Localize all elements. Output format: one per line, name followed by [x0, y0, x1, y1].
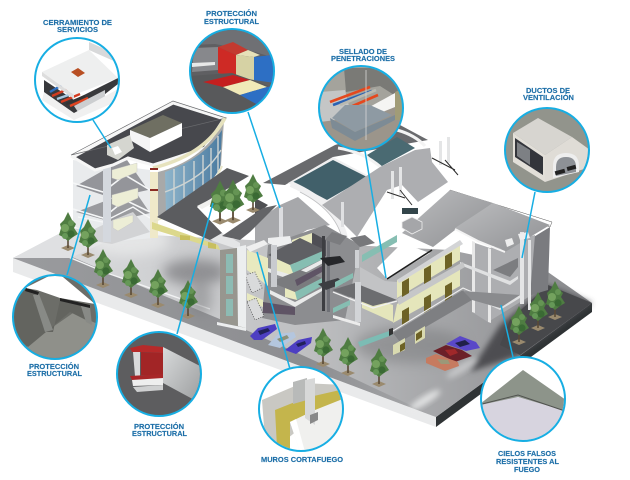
- curved glass facade: [150, 118, 225, 238]
- roof: [73, 103, 224, 170]
- callout: protección estructural left: [10, 272, 100, 378]
- callout: ductos de ventilación: [505, 86, 590, 192]
- label: [132, 422, 187, 438]
- label: [43, 18, 112, 34]
- label: MUROS CORTAFUEGO: [261, 455, 343, 464]
- stair tower: [217, 245, 246, 331]
- label: RESISTENTES AL: [496, 457, 559, 466]
- label: [331, 47, 395, 63]
- callout: cerramiento de servicios: [35, 18, 125, 122]
- label: [523, 86, 574, 102]
- label: FUEGO: [514, 465, 540, 474]
- arched central roof: [255, 125, 458, 245]
- ground shadows: [90, 224, 479, 413]
- label: DUCTOS DE: [526, 86, 570, 95]
- left building with curved facade: [71, 101, 277, 250]
- label: ESTRUCTURAL: [132, 429, 187, 438]
- label: PENETRACIONES: [331, 54, 395, 63]
- label: CERRAMIENTO DE: [43, 18, 112, 27]
- trees: [59, 174, 565, 387]
- label: CIELOS FALSOS: [498, 449, 556, 458]
- leader lines: [67, 112, 535, 369]
- callout: cielos falsos: [480, 357, 566, 474]
- label: PROTECCIÓN: [206, 9, 257, 18]
- service boxes: [112, 163, 138, 231]
- callout: protección estructural top: [190, 9, 280, 115]
- stairs: [245, 272, 264, 320]
- cream facade with doors: [393, 240, 520, 355]
- label: SERVICIOS: [57, 25, 98, 34]
- label: ESTRUCTURAL: [27, 369, 82, 378]
- central tiered block: [245, 225, 432, 347]
- label: [204, 9, 259, 26]
- callout: sellado de penetraciones: [318, 47, 404, 150]
- label: [496, 449, 559, 474]
- doors: [402, 252, 452, 326]
- label: PROTECCIÓN: [134, 422, 184, 431]
- walkway: [393, 288, 520, 342]
- penthouse box: [107, 115, 182, 160]
- label: PROTECCIÓN: [29, 362, 79, 371]
- canopy: [152, 168, 277, 250]
- label: ESTRUCTURAL: [204, 17, 259, 26]
- callout: protección estructural center: [117, 332, 202, 438]
- label: SELLADO DE: [339, 47, 387, 56]
- ground platform: [13, 224, 592, 427]
- tile wall and white interior: [377, 243, 430, 279]
- label: [27, 362, 82, 378]
- label: VENTILACIÓN: [523, 93, 574, 102]
- right wing: [402, 190, 552, 323]
- callout: muros cortafuego: [259, 367, 345, 464]
- cars: [250, 324, 480, 371]
